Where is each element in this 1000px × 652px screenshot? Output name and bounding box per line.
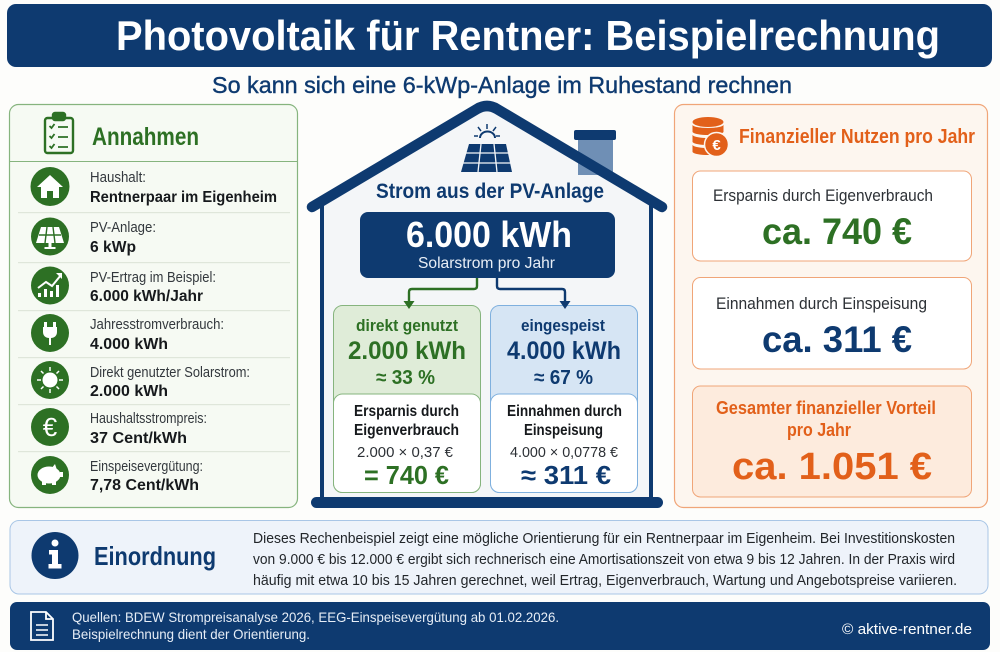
row: Haushaltsstrompreis: 37 Cent/kWh — [90, 430, 187, 447]
icon: coins with euro — [692, 117, 728, 156]
row: Einspeisevergütung — [31, 456, 203, 494]
icon: clipboard checklist — [45, 113, 73, 153]
explanatory text: häufig mit etwa 10 bis 15 Jahren gerechnet, weil Ertrag, Eigenverbrauch, Wartung und Angebotspreise variieren. — [253, 573, 957, 589]
row dividers group — [18, 212, 290, 452]
card: Ersparnis: Ersparnis durch Eigenverbrauch — [713, 186, 933, 205]
panel: Annahmen — [10, 104, 298, 508]
heading: Annahmen: Annahmen — [92, 123, 199, 151]
row: Haushalt — [30, 167, 277, 206]
icon: solar panel with sun — [461, 124, 512, 172]
card: Ersparnis — [692, 171, 972, 261]
panel: house with PV flow — [311, 106, 663, 508]
row: Haushaltsstrompreis — [31, 408, 207, 447]
row: PV-Anlage — [31, 218, 156, 256]
arrow: green to direct use — [404, 278, 477, 309]
card: Gesamter Vorteil: pro Jahr — [787, 420, 851, 440]
icon: coins with euro: € — [712, 137, 721, 154]
explanatory text: von 9.000 € bis 12.000 € ergibt sich rechnerisch eine Amortisationszeit von etwa 9 bis 12 Jahren. In der Praxis wird — [253, 552, 955, 568]
subtitle: So kann sich eine 6-kWp-Anlage im Ruhestand rechnen — [212, 72, 792, 98]
row: Einspeisevergütung: Einspeisevergütung: — [90, 459, 203, 475]
footer — [10, 602, 990, 650]
arrow: blue to feed-in — [497, 278, 570, 309]
card: direkt genutzt: Ersparnis durch — [354, 403, 459, 420]
row: Direkt genutzter Solarstrom — [31, 361, 250, 400]
explanatory text — [253, 531, 957, 589]
row: Jahresstromverbrauch: Jahresstromverbrauch: — [90, 317, 224, 333]
row: Haushaltsstrompreis: € — [43, 412, 58, 442]
card: direkt genutzt: 2.000 × 0,37 € — [357, 445, 453, 461]
total yield box: Solarstrom pro Jahr — [418, 255, 556, 272]
house base — [311, 497, 663, 508]
card: Einnahmen: Einnahmen durch Einspeisung — [716, 294, 927, 313]
card: Gesamter Vorteil — [692, 386, 972, 497]
sources text: Quellen: BDEW Strompreisanalyse 2026, EEG-Einspeisevergütung ab 01.02.2026. — [72, 609, 559, 625]
row: Haushaltsstrompreis: Haushaltsstrompreis: — [90, 411, 207, 427]
row: PV-Ertrag: 6.000 kWh/Jahr — [90, 288, 203, 305]
heading: Strom aus der PV-Anlage: Strom aus der PV-Anlage — [376, 180, 604, 203]
row: PV-Ertrag — [31, 266, 216, 305]
title banner — [7, 4, 992, 67]
roof — [312, 106, 662, 207]
icon: document — [31, 612, 53, 640]
row: PV-Anlage: PV-Anlage: — [90, 220, 156, 236]
card: eingespeist: ≈ 67 % — [534, 367, 593, 389]
card: eingespeist — [490, 306, 638, 492]
card: eingespeist: 4.000 kWh — [507, 337, 621, 365]
card: Einnahmen — [692, 278, 972, 369]
total yield box — [360, 212, 615, 278]
explanatory text: Dieses Rechenbeispiel zeigt eine mögliche Orientierung für ein Rentnerpaar im Eigenheim. Bei Investitionskosten — [253, 531, 955, 547]
card: Gesamter Vorteil: ca. 1.051 € — [732, 446, 932, 488]
card: eingespeist: Einspeisung — [524, 422, 603, 439]
panel: Einordnung — [10, 520, 988, 594]
heading: Einordnung: Einordnung — [94, 541, 216, 571]
chimney — [574, 130, 616, 175]
card: direkt genutzt: direkt genutzt — [356, 316, 458, 335]
row: Direkt genutzter Solarstrom: Direkt genutzter Solarstrom: — [90, 365, 250, 381]
card: eingespeist: ≈ 311 € — [521, 460, 611, 490]
row: PV-Ertrag: PV-Ertrag im Beispiel: — [90, 270, 216, 286]
card: Ersparnis: ca. 740 € — [762, 211, 912, 252]
panel: Finanzieller Nutzen pro Jahr — [674, 104, 988, 508]
row: Jahresstromverbrauch — [31, 314, 224, 353]
row: Einspeisevergütung: 7,78 Cent/kWh — [90, 477, 199, 494]
house walls — [322, 205, 651, 498]
card: eingespeist: 4.000 × 0,0778 € — [510, 445, 618, 461]
card: direkt genutzt: 2.000 kWh — [348, 337, 466, 365]
card: direkt genutzt: Eigenverbrauch — [354, 422, 459, 439]
card: eingespeist: Einnahmen durch — [507, 403, 622, 420]
title banner: Photovoltaik für Rentner: Beispielrechnung — [116, 12, 940, 59]
copyright: © aktive-rentner.de — [842, 621, 972, 638]
row: Direkt genutzter Solarstrom: 2.000 kWh — [90, 383, 168, 400]
card: eingespeist: eingespeist — [521, 316, 605, 335]
sources text — [72, 609, 559, 642]
card: direkt genutzt: ≈ 33 % — [376, 367, 435, 389]
card: direkt genutzt — [334, 306, 480, 492]
total yield box: 6.000 kWh — [406, 214, 572, 255]
card: direkt genutzt: = 740 € — [364, 460, 449, 490]
row: Haushalt: Haushalt: — [90, 170, 146, 186]
card: Gesamter Vorteil: Gesamter finanzieller Vorteil — [716, 398, 936, 418]
sources text: Beispielrechnung dient der Orientierung. — [72, 626, 310, 642]
row: PV-Anlage: 6 kWp — [90, 239, 136, 256]
card: Einnahmen: ca. 311 € — [762, 319, 912, 360]
icon: info — [32, 532, 78, 579]
row: Haushalt: Rentnerpaar im Eigenheim — [90, 189, 277, 206]
house body — [322, 108, 651, 498]
row: Jahresstromverbrauch: 4.000 kWh — [90, 336, 168, 353]
